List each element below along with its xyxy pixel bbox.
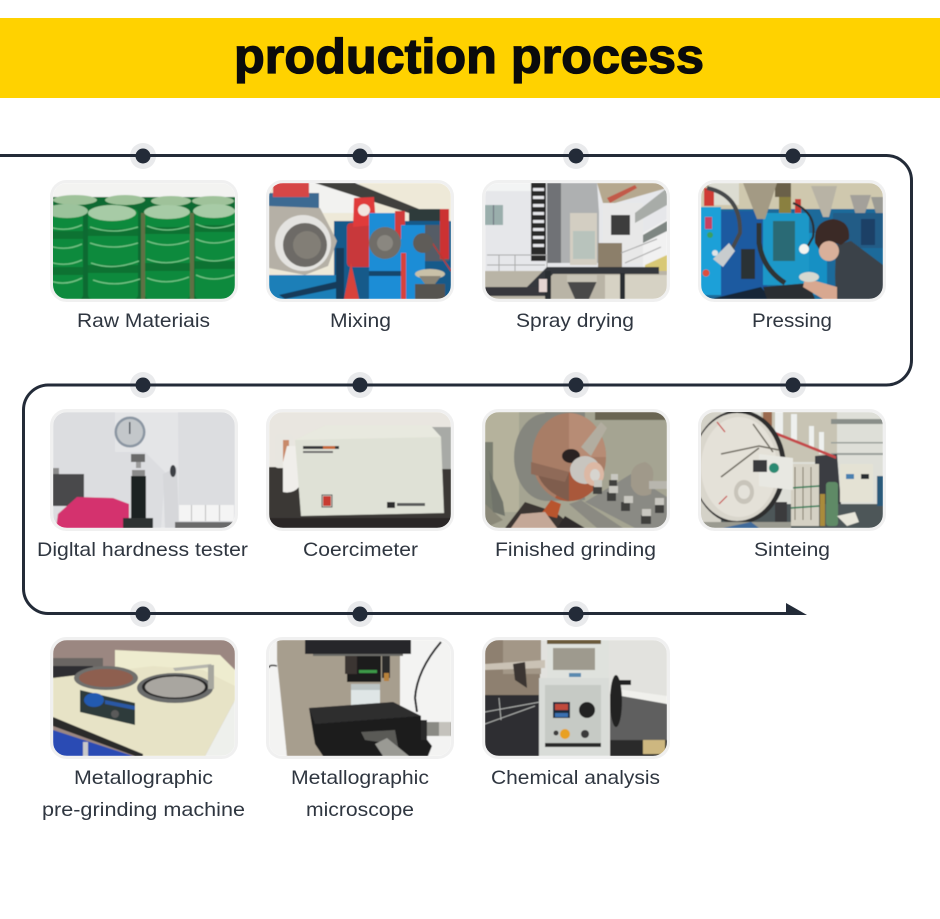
label: Finished grinding: Finished grinding	[495, 539, 656, 561]
label: Digital hardness tester: Digltal hardness tester	[37, 539, 249, 561]
photo: digital hardness tester	[53, 412, 235, 528]
label: Metallographic pre-grinding machine	[42, 767, 245, 821]
photo: spray drying tower	[485, 183, 667, 299]
photo: finished grinding lathe	[485, 412, 667, 528]
photo: metallographic pre-grinding machine	[53, 640, 235, 756]
photo: sintering furnace	[691, 410, 883, 528]
label: Metallographic microscope	[291, 767, 429, 821]
label: Metallographic pre-grinding machine: pre-grinding machine	[42, 799, 245, 821]
arrow: serpentine process flow line	[0, 155, 912, 615]
photo: coercimeter instrument	[269, 412, 451, 528]
photo: mixing machines	[269, 183, 451, 299]
label: Metallographic microscope: Metallographic	[291, 767, 429, 789]
label: Chemical analysis: Chemical analysis	[491, 767, 660, 789]
label: Mixing: Mixing	[330, 310, 391, 332]
photo: pressing, operator at machine	[701, 183, 883, 299]
label: Coercimeter: Coercimeter	[303, 539, 419, 561]
title banner	[0, 18, 940, 98]
label: Raw Materiais: Raw Materiais	[77, 310, 210, 332]
card frames	[52, 182, 884, 758]
photo: chemical analysis instrument	[485, 640, 667, 756]
title: production process	[234, 30, 704, 84]
label: Pressing: Pressing	[752, 310, 832, 332]
label: Sinteing: Sinteing	[754, 539, 830, 561]
label: Metallographic pre-grinding machine: Metallographic	[74, 767, 213, 789]
label: Spray drying: Spray drying	[516, 310, 634, 332]
label: Metallographic microscope: microscope	[306, 799, 414, 821]
photo: raw materials, green barrels	[45, 183, 235, 299]
flow nodes	[130, 143, 806, 627]
photo: metallographic microscope	[269, 640, 453, 756]
